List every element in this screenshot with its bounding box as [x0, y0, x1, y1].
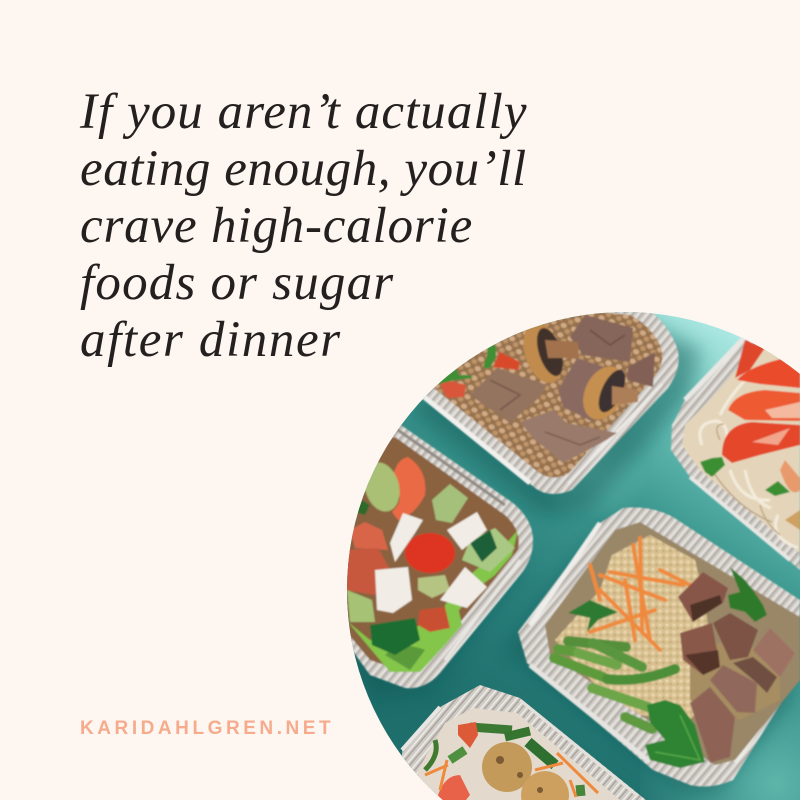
- foil rim: [418, 305, 679, 494]
- title: If you aren’t actually: [80, 84, 528, 140]
- title: after dinner: [80, 312, 342, 368]
- title: foods or sugar: [80, 255, 394, 311]
- teal tabletop: [340, 305, 800, 800]
- buckwheat: [430, 306, 662, 478]
- foil rim: [671, 320, 800, 570]
- couscous: [555, 535, 715, 720]
- foil rim: [402, 685, 646, 800]
- shrimp: [780, 460, 800, 492]
- tray: beef and buckwheat: [418, 305, 679, 494]
- vegetables: [425, 722, 581, 800]
- pasta: [682, 347, 800, 553]
- title: crave high-calorie: [80, 198, 473, 254]
- website credit: KARIDAHLGREN.NET: [80, 718, 334, 739]
- title: eating enough, you’ll: [80, 141, 527, 197]
- tomato slices: [722, 340, 800, 463]
- tomato and herbs: [440, 380, 466, 398]
- carrot shreds: [590, 538, 690, 650]
- title: [80, 84, 528, 368]
- foil rim: [518, 507, 800, 787]
- tray shadows: [345, 310, 790, 790]
- cucumbers: [347, 458, 515, 655]
- beef cubes: [678, 572, 795, 763]
- salad base: [345, 437, 519, 672]
- herb leaves: [700, 457, 790, 496]
- mushrooms: [523, 324, 639, 420]
- lettuce: [348, 530, 518, 672]
- tray: salad: [345, 423, 533, 688]
- meatballs: [482, 742, 569, 800]
- parsley: [568, 567, 767, 768]
- feta cheese: [375, 512, 487, 613]
- foil rim: [345, 423, 533, 688]
- beef pieces: [470, 315, 655, 463]
- tray: pasta with tomato: [671, 320, 800, 570]
- rice: [418, 708, 620, 800]
- tray: rice and meatballs: [402, 685, 646, 800]
- tomatoes: [347, 457, 455, 632]
- green beans: [554, 641, 675, 729]
- inner tray: [545, 522, 800, 765]
- carrot strips: [425, 753, 598, 797]
- circular food photo: [340, 305, 800, 800]
- tray: rice, beans and beef: [518, 507, 800, 787]
